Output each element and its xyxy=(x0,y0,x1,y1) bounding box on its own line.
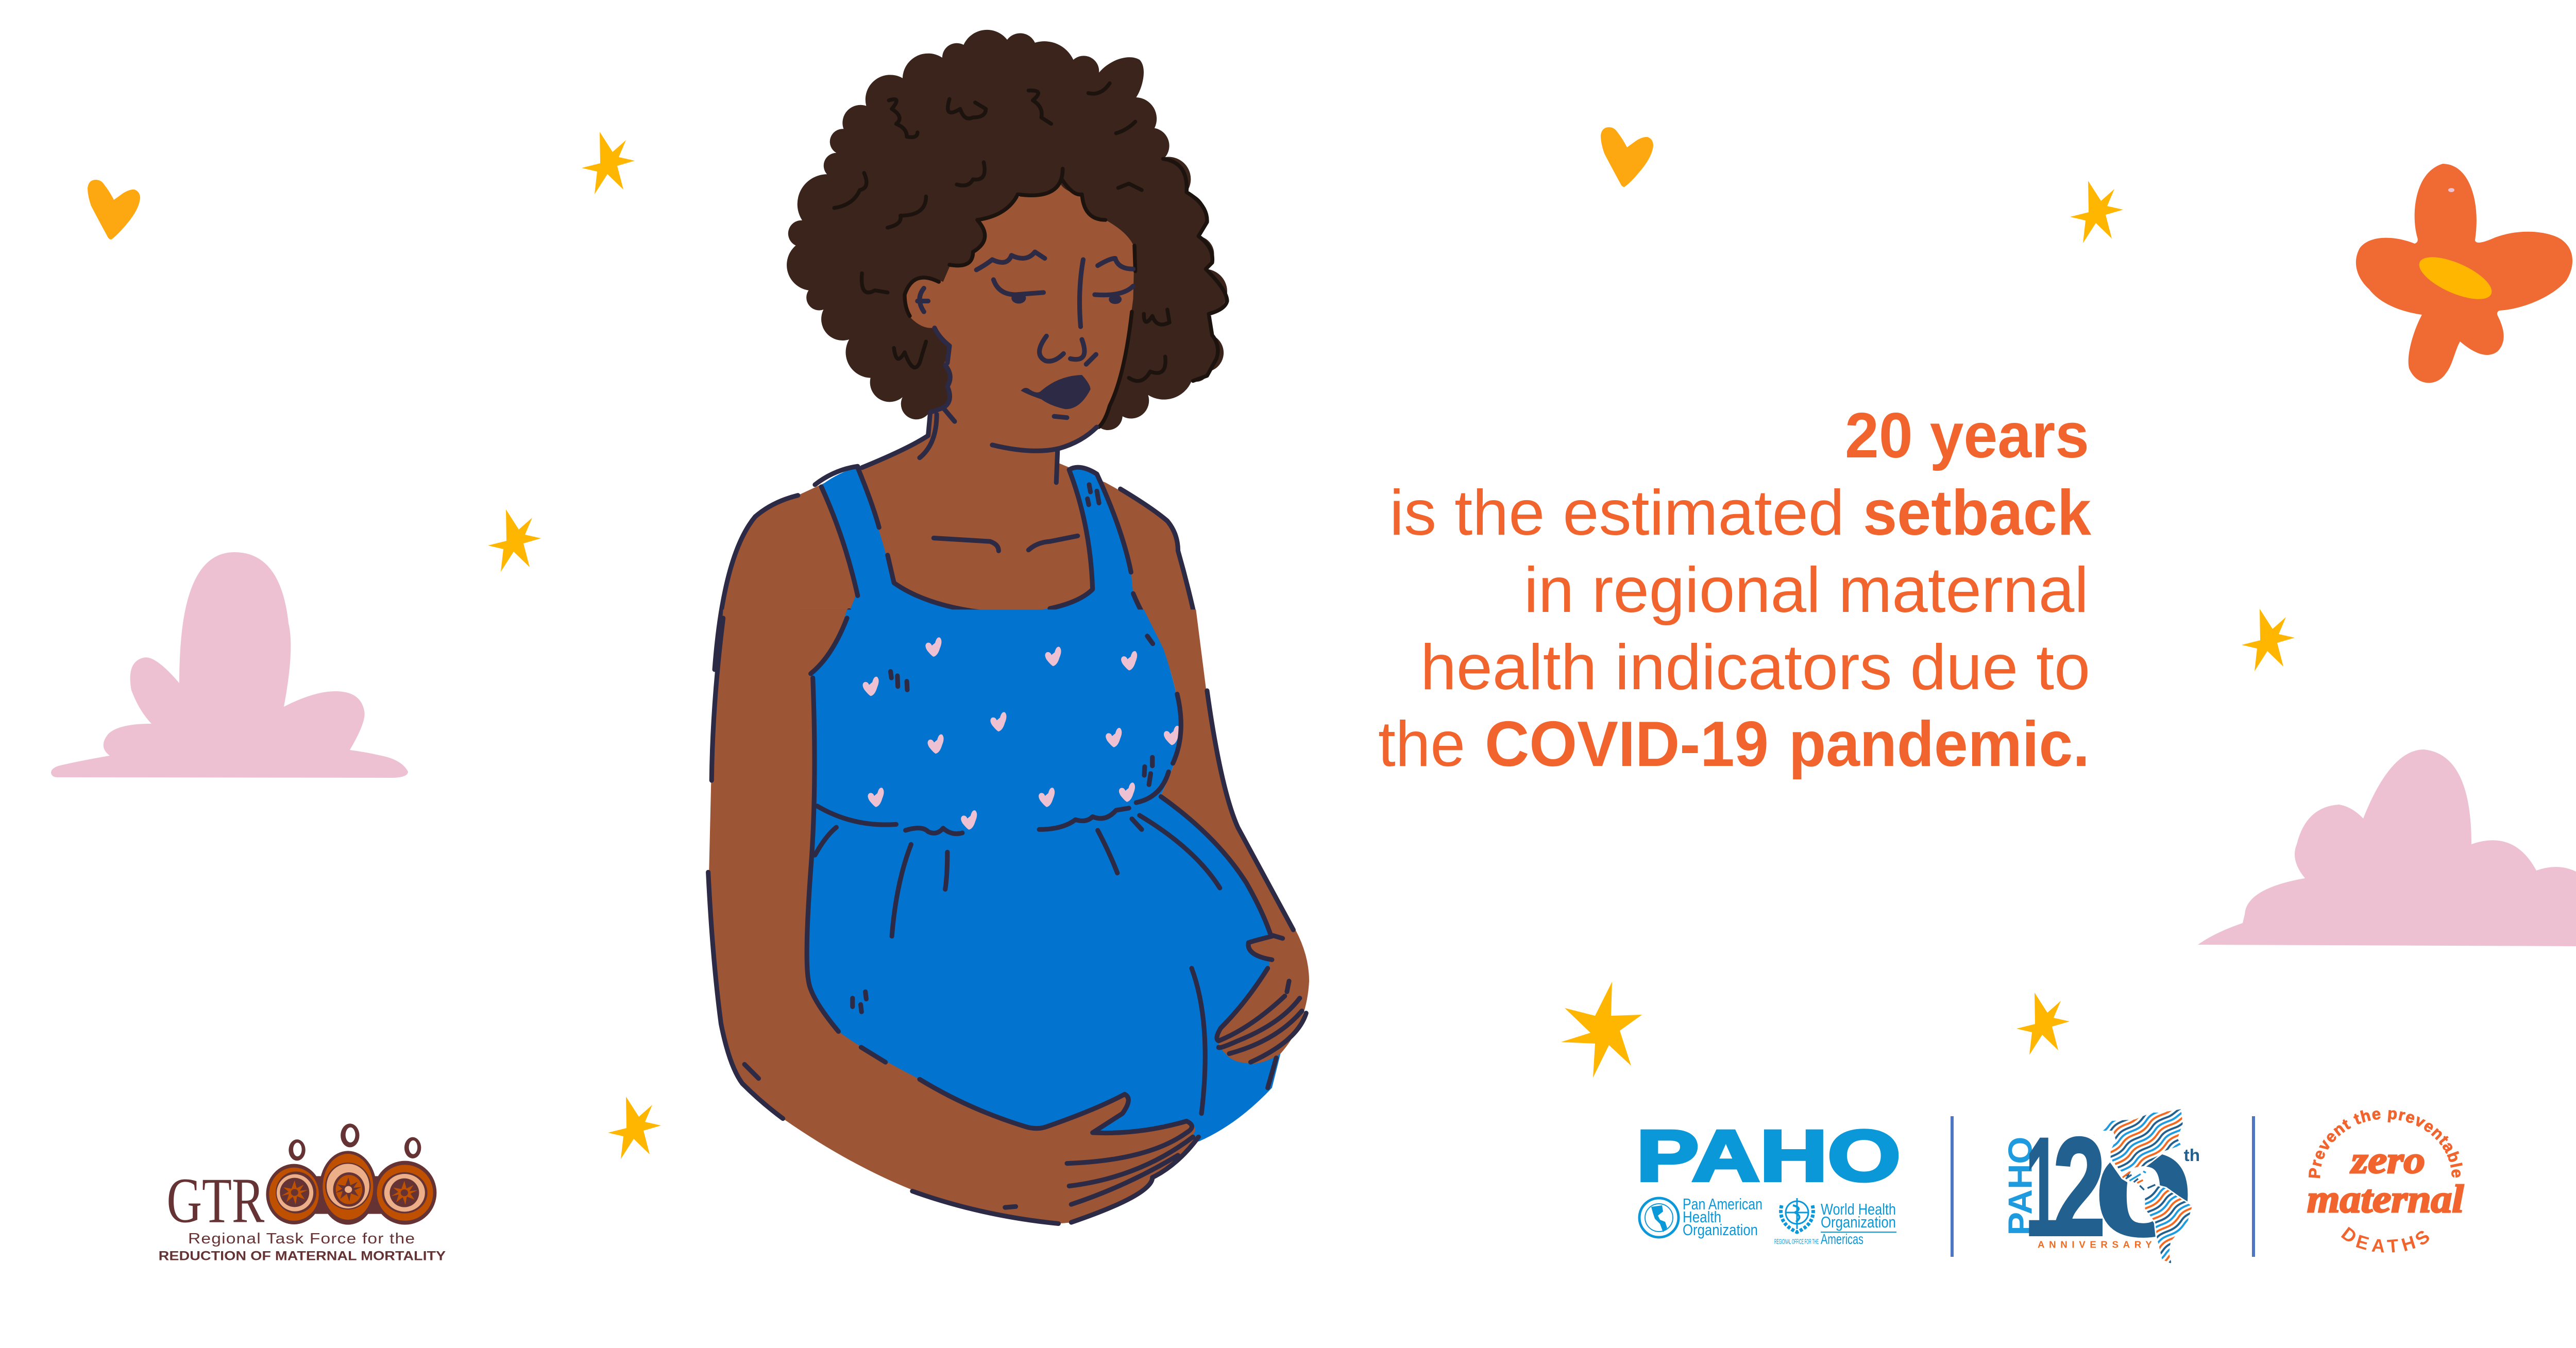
logo: GTR regional task force xyxy=(159,1123,446,1263)
World Health Organization: World Health xyxy=(1821,1200,1896,1218)
numerals 120 xyxy=(2026,1108,2194,1265)
top slogan: Prevent the preventable xyxy=(2308,1110,2463,1179)
eyelash left xyxy=(1011,293,1026,303)
white map halo xyxy=(2111,1109,2192,1264)
star 6 xyxy=(2016,993,2070,1055)
line 2 bold: setback xyxy=(1863,477,2092,549)
line 5 bold covid: COVID-19 xyxy=(1485,709,1769,780)
hair xyxy=(787,30,1227,430)
map: central america dashes xyxy=(2123,1172,2143,1183)
dress: bodice and straps xyxy=(817,468,1171,671)
emblem connecting body xyxy=(299,1176,397,1214)
bottom arc guide xyxy=(2341,1234,2434,1253)
Pan American Health Organization xyxy=(1683,1195,1762,1239)
anniversary label: ANNIVERSARY xyxy=(2038,1239,2152,1250)
face features xyxy=(918,252,1133,418)
dress hearts xyxy=(863,637,1180,830)
zero: zero xyxy=(2350,1139,2425,1182)
hair outlines and curls xyxy=(834,83,1227,427)
emblem figure left xyxy=(266,1164,322,1224)
illustration: pregnant woman xyxy=(708,30,1309,1224)
map: north america stripes xyxy=(2094,1110,2183,1172)
flower highlight xyxy=(2448,188,2454,192)
arm: right, cradling belly xyxy=(1144,609,1309,1064)
numerals 120: 0 xyxy=(2093,1129,2194,1261)
heart: upper middle xyxy=(1601,127,1653,187)
PAHO wordmark: PAHO xyxy=(1636,1115,1901,1196)
emblem figure right xyxy=(374,1161,436,1225)
headline text block xyxy=(1378,400,2092,780)
line 5 regular: the xyxy=(1378,709,1465,780)
star 5 xyxy=(2242,609,2295,671)
mouth xyxy=(1021,375,1091,409)
arm: left, cradling belly xyxy=(709,609,1198,1223)
logo: PAHO 120th anniversary xyxy=(2008,1110,2199,1263)
deaths: DEATHS xyxy=(2341,1227,2429,1253)
maternal: maternal xyxy=(2307,1178,2464,1221)
divider right xyxy=(2252,1116,2255,1257)
line 1: 20 years xyxy=(1845,400,2089,471)
line 5 bold pandemic: pandemic. xyxy=(1789,709,2090,780)
line 4: health indicators due to xyxy=(1420,632,2090,703)
top arc guide xyxy=(2320,1119,2452,1177)
skin: head, neck, shoulders xyxy=(715,179,1204,671)
emblem figure middle xyxy=(319,1151,377,1225)
logo: zero maternal deaths xyxy=(2307,1110,2465,1253)
PAHO emblem xyxy=(1639,1198,1679,1237)
World Health Organization: Americas xyxy=(1821,1231,1863,1247)
divider left xyxy=(1951,1116,1954,1257)
star 4 xyxy=(2070,181,2123,243)
star 3 xyxy=(608,1097,661,1159)
World Health Organization: REGIONAL OFFICE FOR THE xyxy=(1774,1237,1819,1245)
World Health Organization: Organization xyxy=(1821,1213,1896,1231)
flower centre xyxy=(2414,249,2497,308)
emblem heads xyxy=(289,1123,421,1161)
vertical PAHO: PAHO xyxy=(2002,1137,2039,1235)
Pan American Health Organization: Pan American xyxy=(1683,1195,1762,1213)
strap dots xyxy=(1088,485,1099,505)
WHO emblem xyxy=(1781,1198,1813,1232)
numerals 120: 2 xyxy=(2053,1108,2106,1265)
body outlines xyxy=(715,328,1193,670)
cloud: right xyxy=(2198,749,2576,946)
dress: skirt xyxy=(798,609,1287,1156)
Pan American Health Organization: Health xyxy=(1683,1208,1721,1226)
numerals 120: 1 xyxy=(2026,1108,2059,1265)
th: th xyxy=(2184,1146,2200,1165)
heart: upper left xyxy=(88,180,140,240)
Pan American Health Organization: Organization xyxy=(1683,1221,1758,1239)
map: south america stripes xyxy=(2145,1186,2192,1263)
star: large xyxy=(1561,982,1642,1078)
woman: upper body xyxy=(715,30,1227,671)
line 3: in regional maternal xyxy=(1524,555,2089,626)
logo: PAHO xyxy=(1636,1115,1901,1247)
star 1 xyxy=(582,132,635,194)
skin: ear xyxy=(901,265,960,337)
reduction line: REDUCTION OF MATERNAL MORTALITY xyxy=(159,1249,446,1263)
flower petals xyxy=(2356,164,2572,383)
woman: lower body xyxy=(708,609,1309,1224)
flower xyxy=(2356,164,2572,383)
line 2 regular: is the estimated xyxy=(1389,477,1844,549)
GTR wordmark: GTR xyxy=(166,1165,265,1236)
task force line: Regional Task Force for the xyxy=(188,1230,415,1247)
cloud: left xyxy=(51,552,408,778)
World Health Organization xyxy=(1774,1200,1896,1247)
lower body outlines xyxy=(708,618,1306,1224)
eyelash right xyxy=(1109,295,1122,304)
star 2 xyxy=(488,509,541,572)
